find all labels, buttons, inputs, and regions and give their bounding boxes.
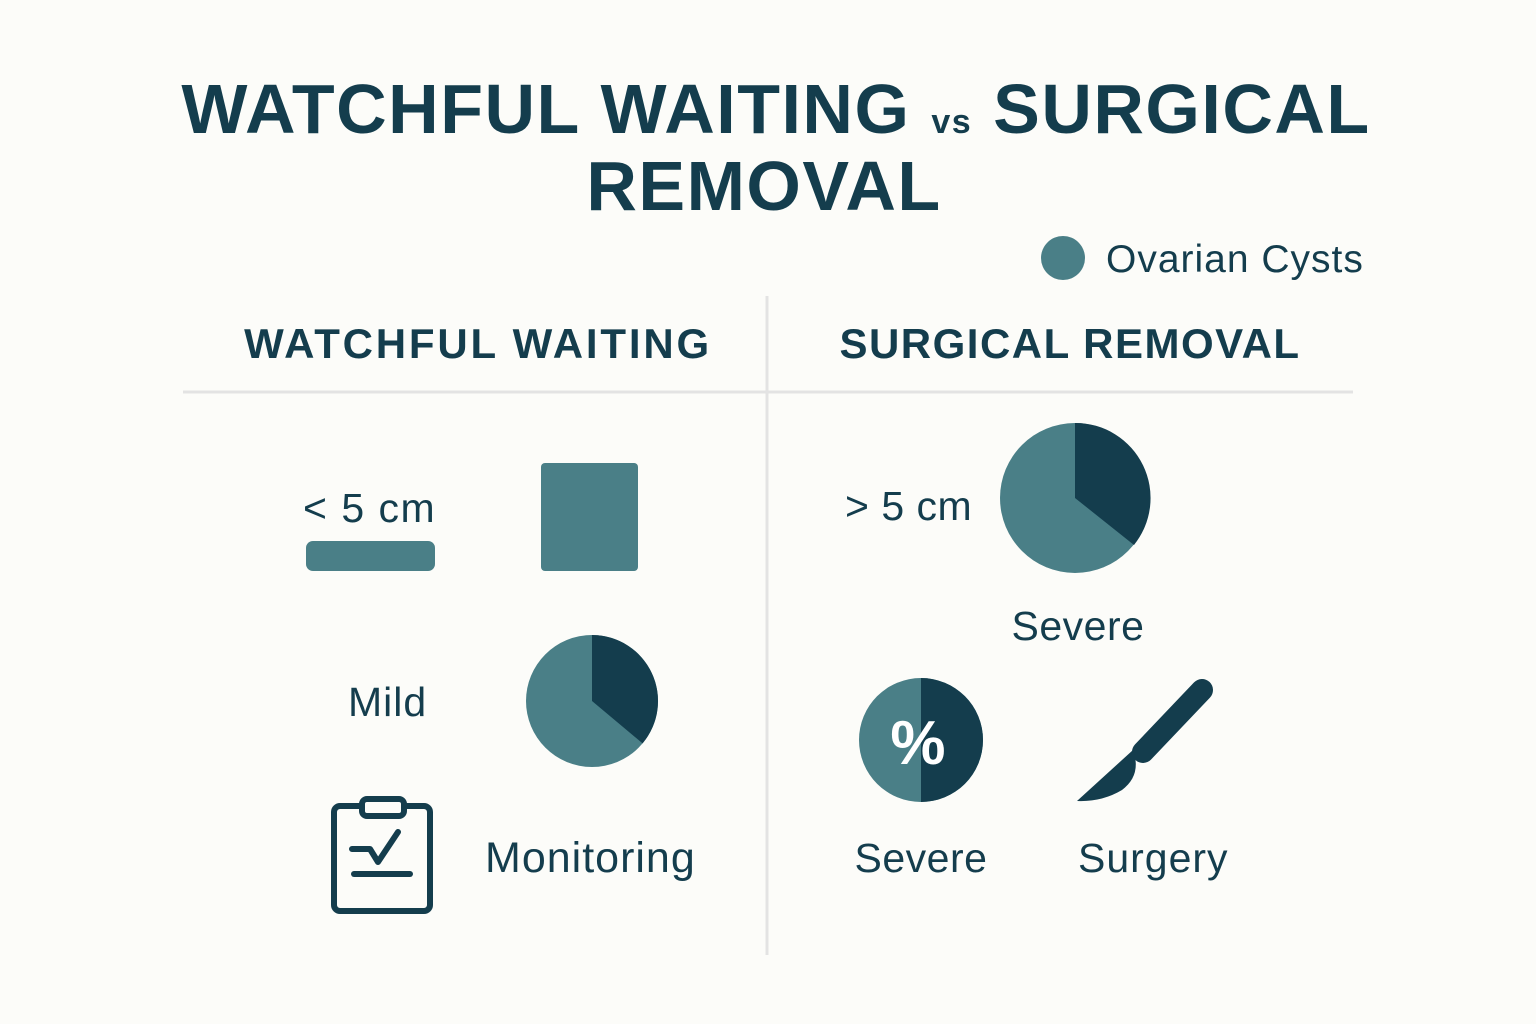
title: WATCHFUL WAITING vs SURGICAL bbox=[181, 70, 1371, 148]
label severe: Severe bbox=[1012, 603, 1144, 649]
icon: percent circle: % bbox=[890, 709, 946, 778]
label mild: Mild bbox=[348, 679, 427, 725]
heading: surgical removal: SURGICAL REMOVAL bbox=[839, 320, 1301, 367]
label surgery: Surgery bbox=[1078, 835, 1229, 881]
heading: watchful waiting: WATCHFUL WAITING bbox=[244, 320, 712, 367]
size label < 5 cm: < 5 cm bbox=[303, 485, 436, 531]
label monitoring: Monitoring bbox=[485, 834, 696, 882]
pie: mild bbox=[526, 635, 658, 767]
panel: surgical removal bbox=[845, 423, 1229, 881]
label severe 2: Severe bbox=[855, 835, 987, 881]
legend: ovarian cysts: Ovarian Cysts bbox=[1106, 238, 1364, 281]
size label > 5 cm: > 5 cm bbox=[845, 483, 972, 529]
square block bbox=[541, 463, 638, 571]
icon: percent circle bbox=[859, 678, 983, 802]
icon: scalpel bbox=[1077, 690, 1202, 801]
title: REMOVAL bbox=[586, 147, 942, 225]
pie: large bbox=[1000, 423, 1151, 573]
panel: watchful waiting bbox=[303, 463, 696, 911]
icon: clipboard bbox=[334, 799, 430, 911]
title bbox=[181, 70, 1371, 225]
bar: small size bbox=[306, 541, 435, 571]
